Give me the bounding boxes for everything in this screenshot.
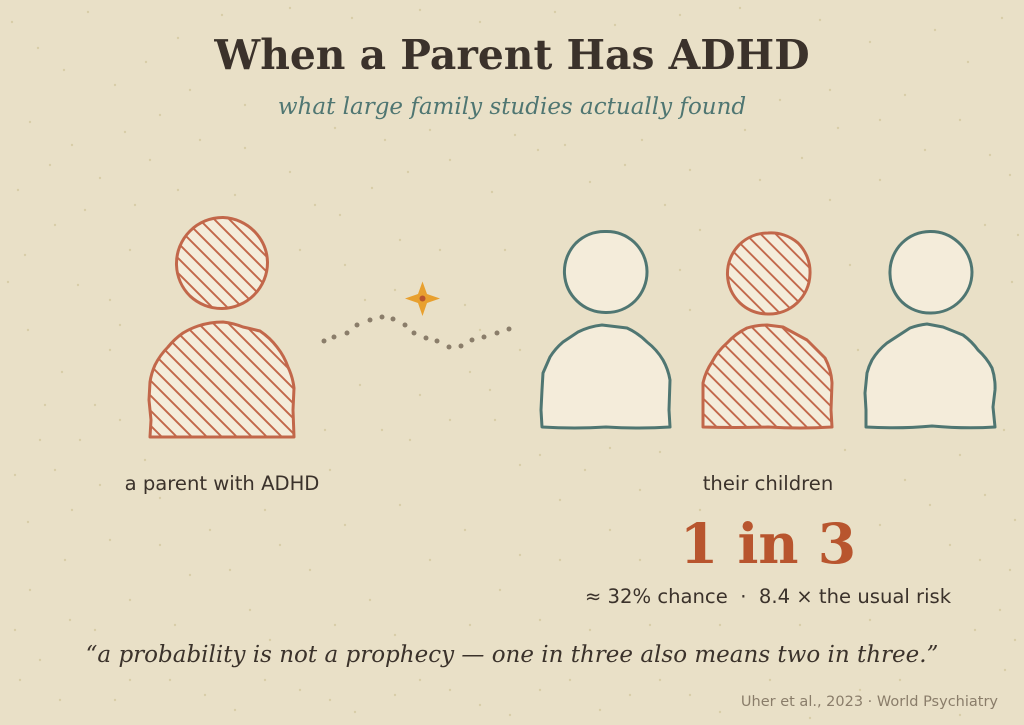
quote: “a probability is not a prophecy — one in three also means two in three.” (86, 642, 938, 668)
source: Uher et al., 2023 · World Psychiatry (741, 694, 998, 710)
icon: child three (865, 231, 995, 428)
icon: child two with ADHD (703, 233, 832, 428)
connector: dotted line (322, 314, 512, 350)
icon: four-point star (405, 282, 440, 316)
label: parent: a parent with ADHD (125, 472, 319, 495)
subtitle: what large family studies actually found (278, 94, 746, 120)
title: When a Parent Has ADHD (213, 31, 810, 79)
icon: parent with ADHD (149, 217, 294, 437)
big stat: 1 in 3 (680, 512, 856, 577)
label: children: their children (703, 472, 833, 495)
stat detail: ≈ 32% chance · 8.4 × the usual risk (585, 585, 952, 608)
icon: child one (541, 231, 670, 428)
